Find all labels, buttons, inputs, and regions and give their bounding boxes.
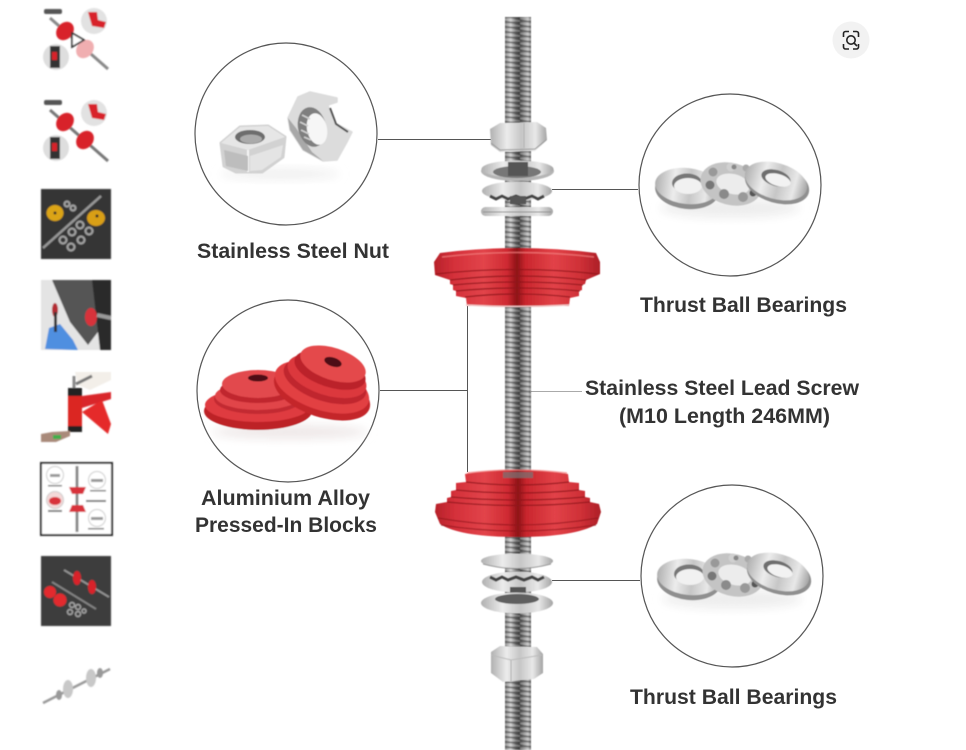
- bottom hex nut: [491, 646, 543, 682]
- thumbnail 1: product overview with play icon: [43, 8, 108, 70]
- connector lines: [378, 140, 640, 580]
- upper thrust bearing on screw: [481, 160, 554, 216]
- lower thrust bearing on screw: [481, 554, 553, 614]
- label: aluminium blocks: Aluminium Alloy: [201, 487, 370, 510]
- thumbnail 2: product overview: [43, 100, 108, 161]
- photo: two steel hex nuts: [220, 92, 352, 179]
- photo: thrust bearing parts: [655, 546, 816, 609]
- thumbnail 4: tool fitted in bike frame: [41, 280, 111, 350]
- panel: upper thrust bearing photo: [639, 94, 821, 276]
- thumbnail 6: selected infographic thumbnail: [41, 463, 112, 535]
- thumbnail 5: red bike frame: [41, 372, 111, 442]
- label: lead screw: (M10 Length 246MM): [619, 405, 830, 428]
- label: lower thrust ball bearings: Thrust Ball Bearings: [630, 686, 837, 709]
- label: aluminium blocks: [195, 487, 377, 537]
- top hex nut: [490, 122, 547, 152]
- icon: visual search button: [832, 22, 870, 58]
- photo: thrust bearing parts: [653, 155, 814, 218]
- panel: aluminium blocks photo: [197, 300, 379, 482]
- label: aluminium blocks: Pressed-In Blocks: [195, 514, 377, 537]
- label: upper thrust ball bearings: Thrust Ball Bearings: [640, 294, 847, 317]
- photo: two red stepped blocks: [204, 338, 377, 439]
- thumbnail 8: assembled tool: [43, 668, 110, 703]
- lead screw: [505, 17, 531, 750]
- thumbnail 3: gold kit on dark background: [41, 189, 111, 259]
- lower aluminium pressed-in block: [435, 470, 601, 537]
- label: lead screw: [585, 377, 860, 428]
- panel: lower thrust bearing photo: [641, 485, 823, 667]
- upper aluminium pressed-in block: [434, 248, 600, 306]
- label: lead screw: Stainless Steel Lead Screw: [585, 377, 860, 400]
- thumbnail 7: red kit on dark background: [41, 556, 111, 626]
- label: stainless steel nut: Stainless Steel Nut: [197, 240, 389, 263]
- thumbnail strip: [41, 8, 112, 703]
- panel: stainless steel nut photo: [195, 43, 377, 225]
